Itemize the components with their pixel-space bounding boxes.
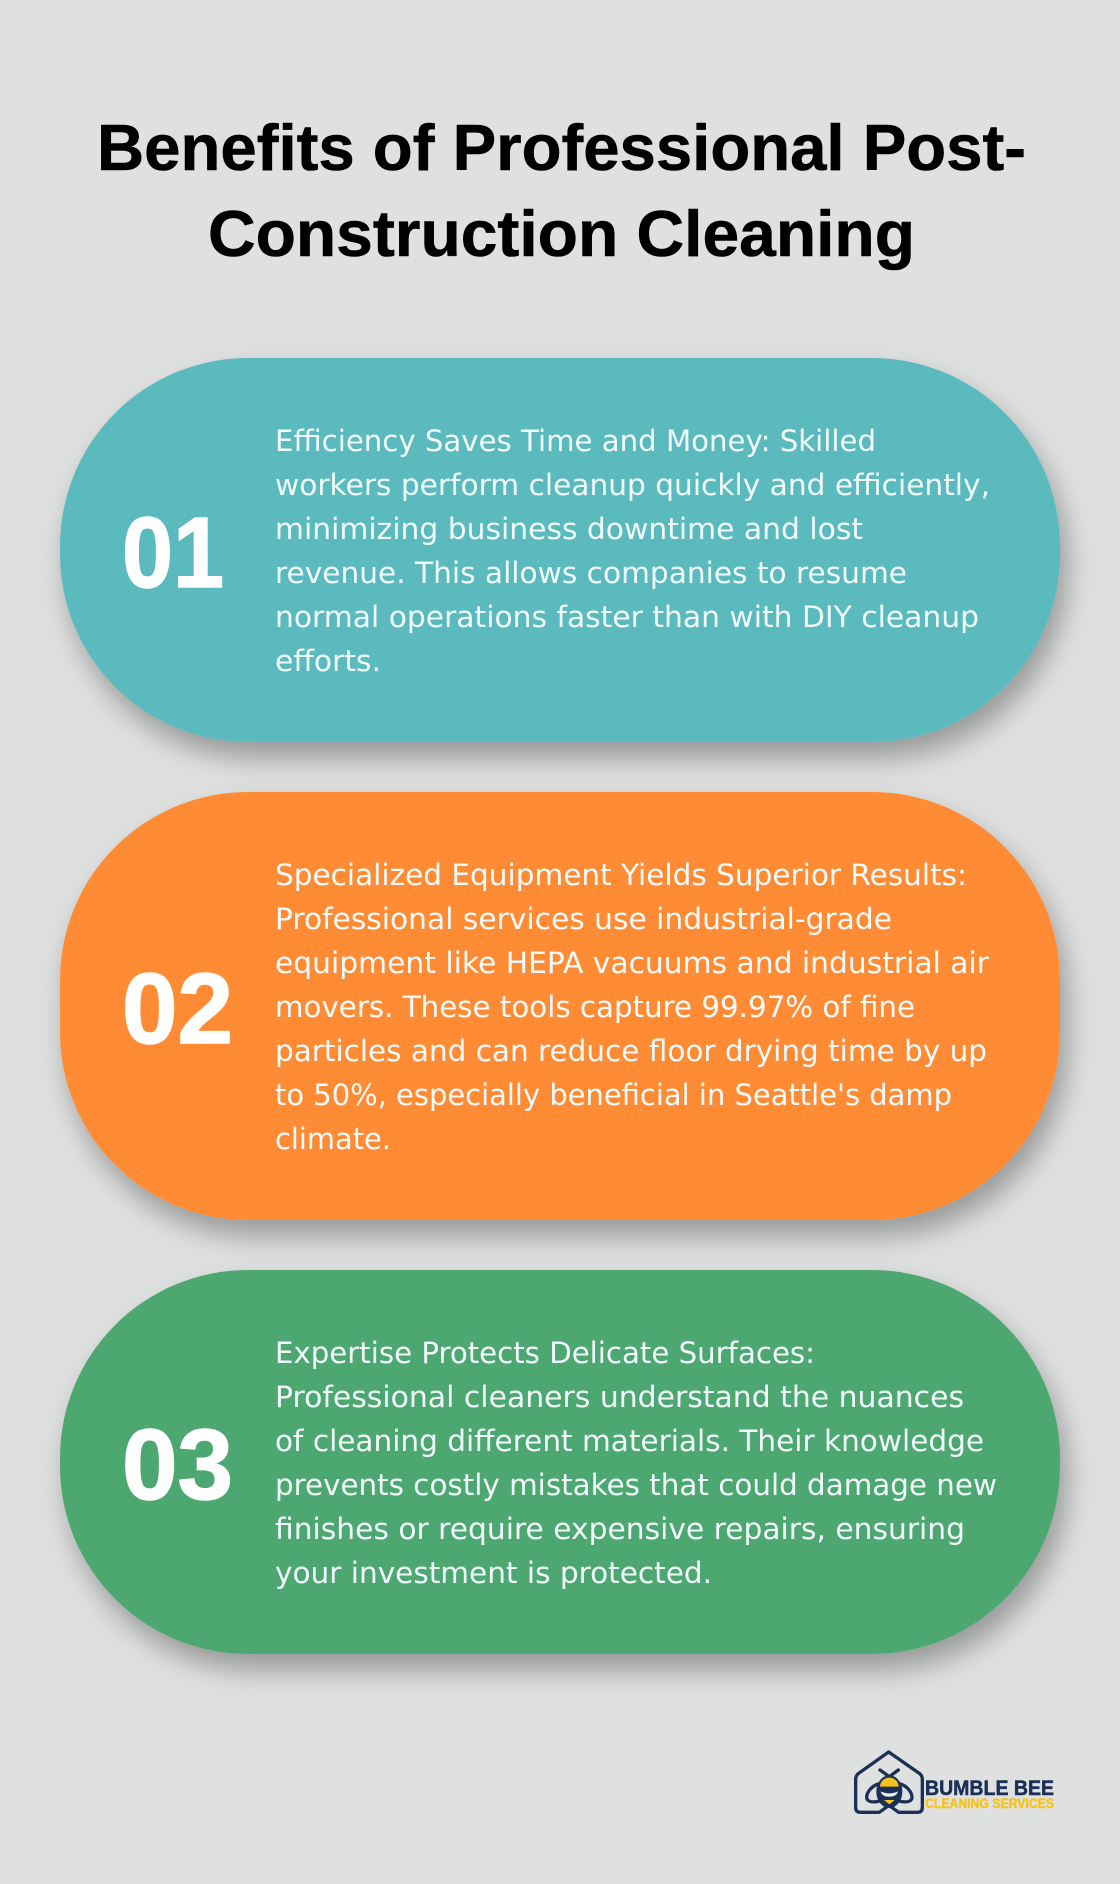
text block: expertise: Expertise Protects Delicate Surfaces: [275,1336,815,1370]
text block: equipment: to 50%, especially beneficial in Seattle's damp [275,1078,952,1112]
wordmark: BUMBLE BEE [925,1777,1054,1800]
text block: efficiency: Efficiency Saves Time and Money: Skilled [275,424,876,458]
text block: equipment [275,858,990,1156]
text block: equipment: Professional services use industrial-grade [275,902,892,936]
number 01: 01 [122,497,224,609]
panel: 02 equipment [60,792,1060,1220]
text block: expertise: your investment is protected. [275,1556,712,1590]
title: Benefits of Professional Post- [97,111,1026,184]
text block: efficiency: normal operations faster than with DIY cleanup [275,600,979,634]
text block: expertise: Professional cleaners understand the nuances [275,1380,964,1414]
tagline: CLEANING SERVICES [925,1796,1054,1811]
logo: Bumble Bee Cleaning Services [856,1752,1054,1812]
text block: efficiency: minimizing business downtime and lost [275,512,863,546]
text block: expertise: of cleaning different materials. Their knowledge [275,1424,984,1458]
text block: equipment: equipment like HEPA vacuums and industrial air [275,946,990,980]
text block: efficiency: efforts. [275,644,381,678]
text block: expertise [275,1336,997,1590]
text block: efficiency: workers perform cleanup quickly and efficiently, [275,468,990,502]
title: Construction Cleaning [208,197,915,270]
number 02: 02 [122,953,233,1065]
text block: equipment: Specialized Equipment Yields Superior Results: [275,858,967,892]
number 03: 03 [122,1409,233,1521]
text block: expertise: finishes or require expensive repairs, ensuring [275,1512,965,1546]
panel: 01 efficiency [60,358,1060,742]
text block: efficiency: revenue. This allows companies to resume [275,556,907,590]
text block: equipment: particles and can reduce floor drying time by up [275,1034,987,1068]
text block: efficiency [275,424,990,678]
text block: expertise: prevents costly mistakes that could damage new [275,1468,997,1502]
text block: equipment: movers. These tools capture 99.97% of fine [275,990,915,1024]
title [97,111,1026,270]
panel: 03 expertise [60,1270,1060,1654]
icon: bee in house [856,1752,922,1812]
text block: equipment: climate. [275,1122,391,1156]
